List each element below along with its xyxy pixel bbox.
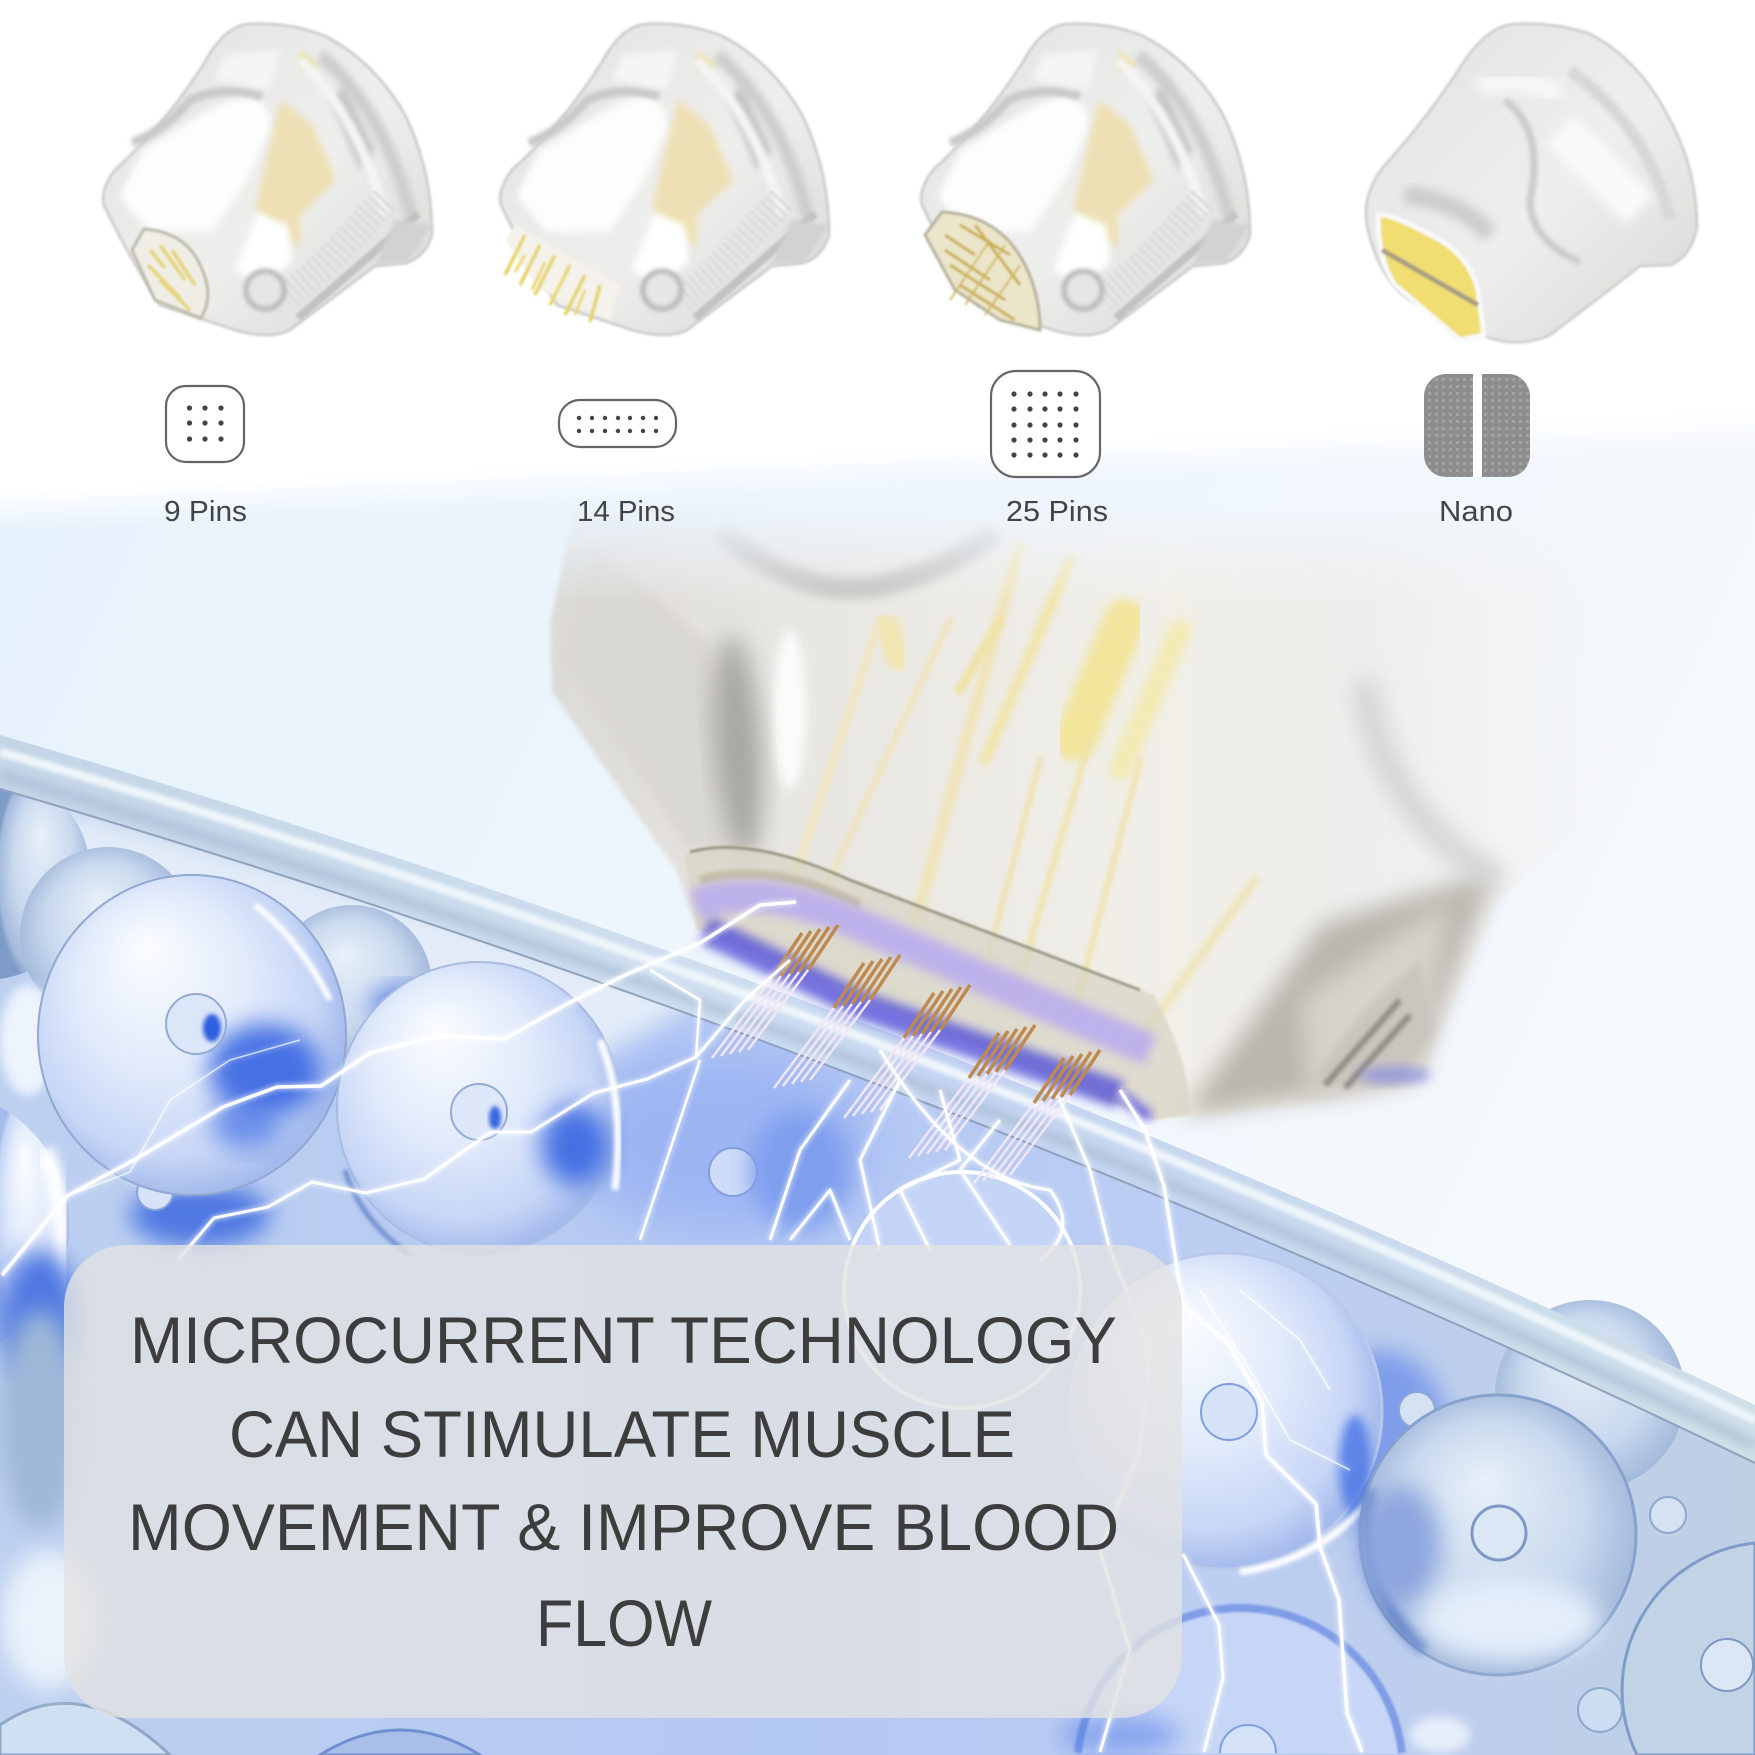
applicator side screw bbox=[1310, 960, 1435, 1088]
tip: 14 pins bbox=[500, 24, 829, 335]
applicator body bbox=[548, 525, 1522, 1119]
cell: large center-left bbox=[337, 962, 621, 1255]
cell: right-center electrified bbox=[1066, 1253, 1450, 1572]
caption text: MOVEMENT & IMPROVE BLOOD bbox=[128, 1490, 1119, 1564]
lightning bolts bbox=[2, 902, 1362, 1752]
tip: 9 pins bbox=[103, 24, 432, 335]
light area below the tube bbox=[0, 795, 700, 1060]
cell: upper-left background cells bbox=[0, 771, 870, 1390]
panel background bbox=[64, 1245, 1182, 1718]
skin cross-section with cells bbox=[0, 735, 1755, 1755]
cell strip: bottom-left bbox=[0, 1310, 1180, 1755]
caption text bbox=[128, 1303, 1119, 1660]
icon: nano layout bbox=[1424, 374, 1530, 477]
label: 25 pins: 25 Pins bbox=[1006, 496, 1108, 528]
nano gold plate bbox=[1378, 215, 1484, 340]
nano body bbox=[1366, 24, 1697, 342]
needle pins bbox=[712, 925, 1100, 1183]
needle patch bbox=[132, 229, 208, 318]
label: 9 pins: 9 Pins bbox=[164, 496, 247, 528]
purple electric glow under head bbox=[695, 896, 1150, 1118]
label: 14 pins: 14 Pins bbox=[577, 496, 675, 528]
cell: far right bbox=[1578, 1543, 1755, 1755]
caption text: CAN STIMULATE MUSCLE bbox=[229, 1397, 1015, 1471]
applicator shading bbox=[560, 530, 1497, 1116]
large applicator head bbox=[548, 524, 1527, 1126]
tip: 25 pins bbox=[921, 24, 1250, 335]
icon: 9 pin layout bbox=[166, 386, 244, 462]
nano inner details bbox=[1405, 70, 1670, 262]
caption text: MICROCURRENT TECHNOLOGY bbox=[130, 1303, 1117, 1377]
skin top tube bbox=[0, 735, 1755, 1463]
needle patch bbox=[925, 212, 1040, 330]
cell: large left bbox=[38, 875, 346, 1195]
cell: center electrified bbox=[709, 1110, 1080, 1408]
caption text: FLOW bbox=[536, 1586, 713, 1660]
icon: 25 pin layout bbox=[991, 371, 1100, 477]
cell: bottom center bbox=[1075, 1605, 1470, 1753]
applicator yellow conductors bbox=[790, 545, 1255, 1040]
applicator collar band bbox=[684, 846, 1190, 1120]
caption panel bbox=[64, 1245, 1182, 1718]
needle patch bbox=[505, 225, 620, 322]
cell: right bbox=[1360, 1300, 1686, 1675]
icon: 14 pin layout bbox=[559, 400, 676, 447]
tip: nano bbox=[1366, 24, 1697, 342]
label: nano: Nano bbox=[1439, 496, 1513, 528]
